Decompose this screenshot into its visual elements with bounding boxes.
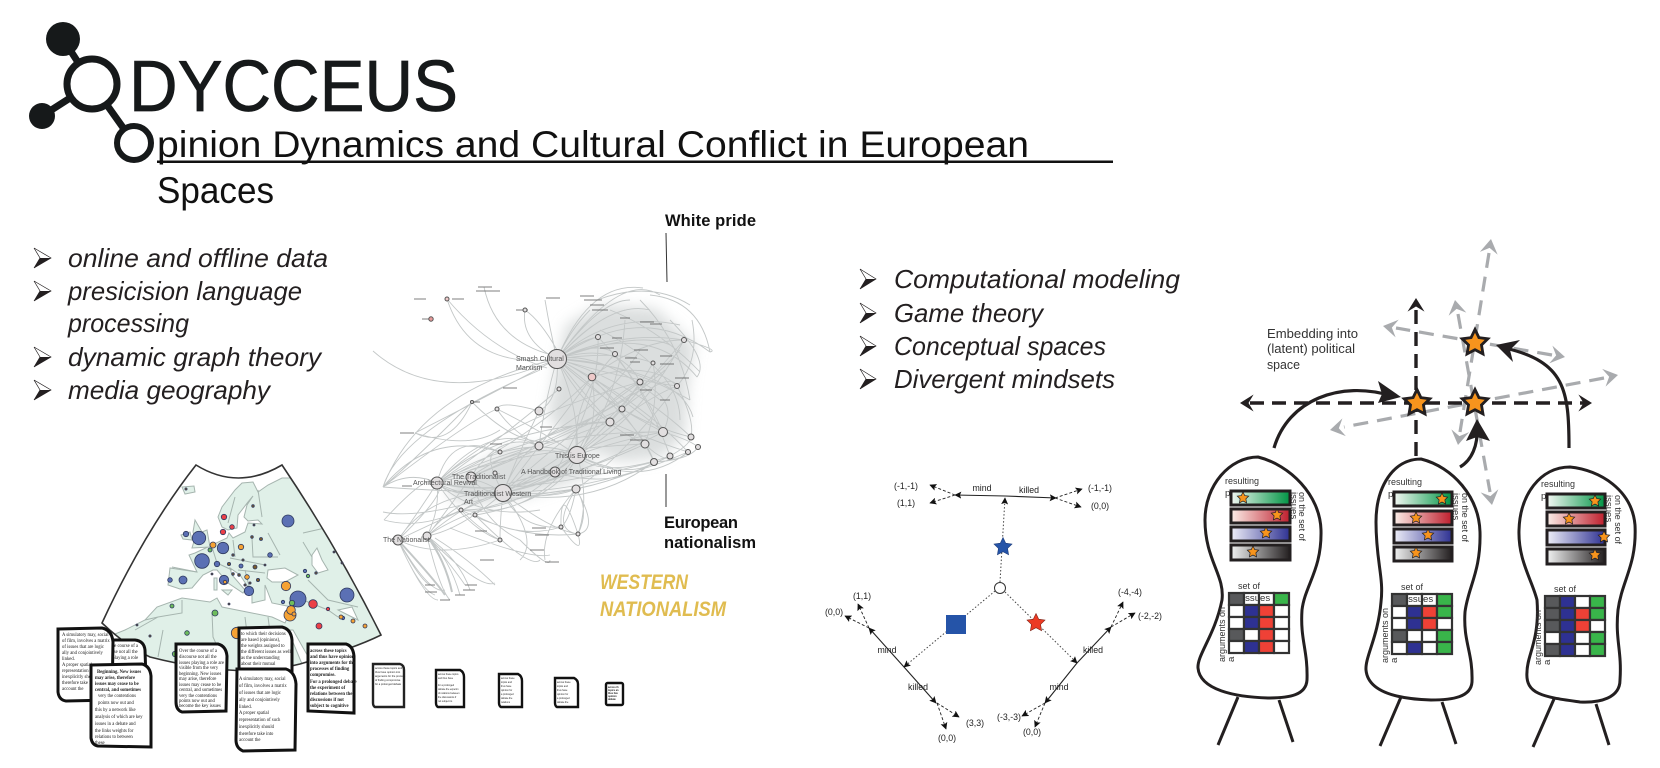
document 8: across these topics and [375,666,403,670]
title: Spaces [157,170,274,211]
document 9: and thus have [438,677,454,680]
agent 3 [1519,467,1635,747]
agent 2: a [1389,657,1400,663]
document 7: subject to cognitive [310,704,349,709]
document 4 [176,644,227,712]
game tree: (0,0) [1091,501,1109,511]
network graph: Traditionalist Western [464,491,531,498]
document 10: thus have [501,685,512,688]
agent 1: set of [1238,581,1260,592]
document 7: into arguments for the [310,661,355,666]
label: European nationalism: nationalism [664,534,756,552]
game tree: (-4,-4) [1118,587,1142,597]
agent 2 [1366,459,1480,746]
game tree: killed [1019,485,1039,495]
agent 3: set of [1554,584,1576,595]
document 8: arguments for the process [375,674,406,678]
game tree: (-3,-3) [997,712,1021,722]
network graph: This is Europe [555,453,600,460]
document 6: A proper spatial [239,711,270,716]
document 11: a prolonged [557,697,570,700]
document 7: discussions if not [310,698,344,703]
agent 3: on the set of [1612,495,1623,544]
document 11: topics and [557,685,569,688]
document 9: the discussions if [438,696,457,699]
network graph [373,287,712,600]
bullet list: data: dynamic graph theory [68,342,323,372]
agent 1: on the set of [1296,492,1307,541]
document 4: issues playing a role are [179,661,224,666]
game tree: (0,0) [825,607,843,617]
document 8: of finding compromise [375,678,401,682]
label: European nationalism [664,474,756,552]
document 6: ally and conjointively [239,698,281,703]
document 3: central, and sometimes [95,688,141,693]
document 6: of issues that are logic [239,691,281,696]
document 10: relations [501,701,511,704]
agent 3: arguments on [1533,610,1544,665]
document 9: for a prolonged [438,684,455,687]
title [157,124,1113,211]
document 5 [239,627,292,672]
document 8 [373,664,406,707]
document 12: debate [608,698,616,701]
agent 2: positions [1388,489,1426,500]
document 4: points now out and [179,699,215,704]
agent 3: issues [1603,495,1614,522]
document 8: for a prolonged debate [375,682,402,686]
game tree: (0,0) [1023,727,1041,737]
document 5: about their mutual [241,662,276,667]
document 1: of issues that are logic [62,645,104,650]
logo: ODYCCEUS [29,22,458,160]
document 11: debate the [557,701,569,704]
document 3: may arise, therefore [95,676,135,681]
network graph: The Nationalist [383,537,430,544]
document 2: issues playing a role [100,656,138,661]
orange stars [1404,330,1488,414]
document 12: opinion [608,695,617,698]
document 1: inexplicitly should [62,675,98,680]
document 9: debate the experim [438,688,458,691]
game tree: (-1,-1) [894,481,918,491]
document 6: A simulatory may, social [239,677,286,682]
political space axes [1240,238,1620,507]
logo: ODYCCEUS: DYCCEUS [129,47,458,127]
label: Western nationalism [600,571,726,621]
bullet list: data: online and offline data [68,243,328,273]
document 6 [236,669,296,751]
document 2: discourse not all the [100,650,138,655]
document 6: inexplicitly should [239,725,275,730]
document 3: relations to between [95,735,133,740]
document 3: analysis of which are key [95,715,143,720]
document 11 [555,678,578,707]
label: European nationalism: European [664,514,738,532]
agent 2: issues [1450,493,1461,520]
document 10: debate the [501,697,513,700]
network graph: A Handbook of Traditional Living [521,469,622,476]
map of Europe with media bubbles [101,464,382,672]
document 12: across th [608,686,619,689]
document 11: across these [557,681,571,684]
bullet list: data [34,243,328,405]
document 3: issues in a debate and [95,722,136,727]
label: Western nationalism: WESTERN [600,571,689,594]
caption: embedding: space [1267,357,1300,372]
document 11: thus have [557,689,568,692]
agent 1: a [1226,656,1237,662]
document 5: as the understanding [241,656,280,661]
network graph: Architectural Revival [413,480,477,487]
game tree: (-1,-1) [1088,483,1112,493]
game tree: killed [1083,645,1103,655]
agent 1: resulting [1225,476,1259,487]
document 3: Beginning. New issues [97,670,141,675]
document 7: and thus have opinion [310,655,355,660]
document 9 [436,670,464,707]
document 1: A proper spatial [62,663,93,668]
document 12: topics an [608,689,619,692]
document 3: issues may cease to be [95,682,139,687]
document 4: become the key issues [179,704,221,709]
document 10: across these [501,677,515,680]
caption: embedding: Embedding into [1267,326,1358,341]
agent 3: a [1542,659,1553,665]
document 1: account the [62,687,83,692]
agent 1: issues [1243,593,1270,604]
document 4: central, and sometimes [179,688,222,693]
bullet list: modeling: Computational modeling [894,264,1181,294]
agent 3: resulting [1541,479,1575,490]
caption: embedding: (latent) political [1267,341,1355,356]
caption: embedding [1267,326,1358,372]
document 7: across these topics [310,649,347,654]
document 7: the experiment of [310,686,346,691]
document 12 [606,683,623,705]
game tree: (1,1) [897,498,915,508]
document 4: issues may cease to be [179,683,221,688]
document 5: to which their decisions [241,632,286,637]
game tree: mind [972,483,992,493]
document 5: the different issues as well [241,650,291,655]
document 1: of film, involves a matrix [62,639,110,644]
game tree: (3,3) [966,718,984,728]
network graph: The Traditionalist [452,474,505,481]
document 5: the weights assigned to [241,644,285,649]
document 8: thus have opinion into [375,670,401,674]
bullet list: modeling: Game theory [894,298,1045,328]
document 7: For a prolonged debate [310,680,357,685]
agent 1 [1198,457,1321,745]
document 4: visible from the very [179,666,219,671]
document 3: the links weights for [95,729,134,734]
document 4: very the contentions [179,694,217,699]
document 3: very the contentions [98,694,136,699]
document 1 [58,628,113,701]
document 7: processes of finding [310,667,350,672]
agent 1: arguments on [1217,607,1228,662]
bullet list: data: media geography [68,375,272,405]
game tree: (1,1) [853,591,871,601]
document 2: Over the course of a [100,644,139,649]
documents stack [58,627,623,751]
bullet list: data: presicision language [67,276,302,306]
game tree: mind [1049,682,1069,692]
game tree: killed [908,682,928,692]
network graph: Smash Cultural [516,356,564,363]
document 4: Over the course of a [179,649,218,654]
document 5: are based (opinions), [241,638,280,643]
document 3: these [95,741,105,746]
agent 2: issues [1406,594,1433,605]
document 9: across these topics [438,673,459,676]
document 1: ally and conjointively [62,651,104,656]
document 9: of relations between [438,692,460,695]
document 6: representation of such [239,718,281,723]
curved embedding arrows [1274,340,1569,467]
document 4: beginning. New issues [179,672,221,677]
network graph: Marxism [516,365,543,372]
label: White pride: White pride [665,212,756,230]
document 3: points now out and [98,701,134,706]
document 4: discourse not all the [179,655,217,660]
document 2 [97,640,146,680]
document 3 [91,664,151,747]
network graph: Art [464,499,473,506]
document 10: opinion for [501,689,512,692]
bullet list: modeling: Conceptual spaces [894,331,1106,361]
document 6: therefore take into [239,732,274,737]
title: pinion Dynamics and Cultural Conflict in European [157,124,1029,165]
document 1: A simulatory may, social [62,633,109,638]
agent 2: resulting [1388,477,1422,488]
agent 3: positions [1541,491,1579,502]
game tree: mind [877,645,897,655]
document 12: thus hav [608,692,619,695]
document 6: of film, involves a matrix [239,684,287,689]
document 1: linked. [62,657,75,662]
agent 2: on the set of [1459,493,1470,542]
label: White pride [665,212,756,282]
document 10: topics and [501,681,513,684]
bullet list: modeling [860,264,1181,394]
document 11: opinion for [557,693,568,696]
document 3: this by a network like [95,708,136,713]
document 7: compromise. [310,673,336,678]
game tree [825,481,1162,743]
document 1: therefore take into [62,681,97,686]
document 6: linked. [239,705,252,710]
agent 1: issues [1288,492,1299,519]
agent 3: issues [1559,596,1586,607]
agent 2: set of [1401,582,1423,593]
document 10 [499,674,522,707]
game tree: (-2,-2) [1138,611,1162,621]
agent 1: positions [1225,488,1263,499]
label: Western nationalism: NATIONALISM [600,598,726,621]
bullet list: modeling: Divergent mindsets [894,364,1115,394]
document 7: relations between the [310,692,352,697]
document 4: may arise, therefore [179,677,216,682]
bullet list: data: processing [67,308,190,338]
document 9: not subject to [438,700,453,703]
game tree: (0,0) [938,733,956,743]
document 10: a prolonged [501,693,514,696]
document 1: representation of such [62,669,104,674]
document 6: account the [239,738,260,743]
agent 2: arguments on [1380,608,1391,663]
document 7 [308,644,357,713]
